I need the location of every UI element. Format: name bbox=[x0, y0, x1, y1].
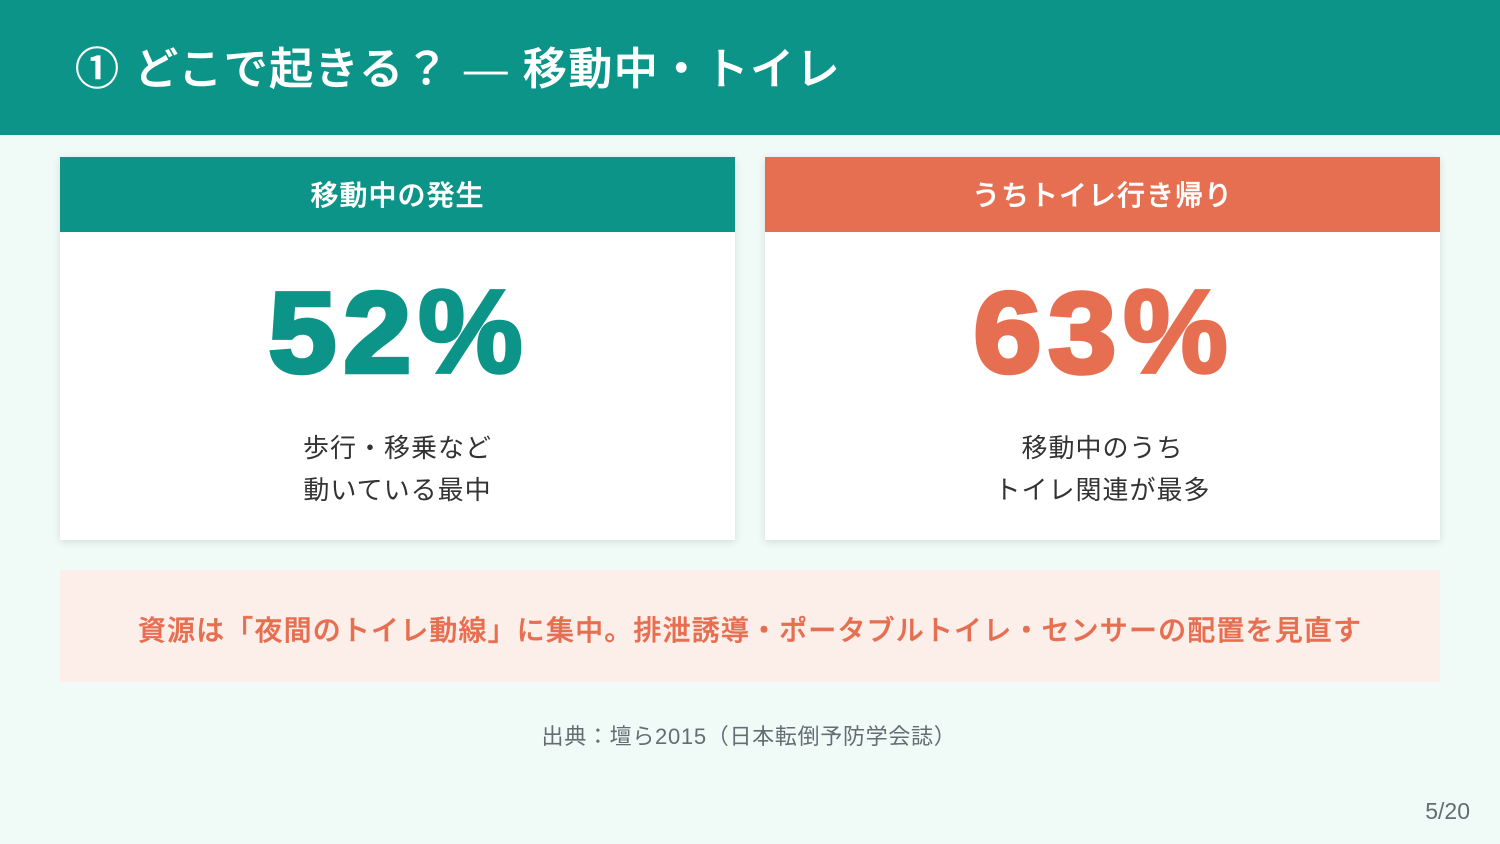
panel heading: movement bbox=[60, 157, 735, 232]
panel: toilet share bbox=[765, 157, 1440, 540]
big number: 63%: 63 bbox=[974, 270, 1123, 397]
header band bbox=[0, 0, 1500, 135]
panel heading: toilet: うちトイレ行き帰り bbox=[972, 180, 1233, 211]
description: toilet: 移動中のうち bbox=[1021, 433, 1184, 463]
title: ① どこで起きる？ — 移動中・トイレ bbox=[75, 45, 841, 94]
big number: 63%: % bbox=[1123, 266, 1228, 398]
panel: movement share bbox=[60, 157, 735, 540]
page number: 5/20 bbox=[1425, 798, 1470, 824]
description: toilet: トイレ関連が最多 bbox=[994, 475, 1210, 505]
source note: 出典：壇ら2015（日本転倒予防学会誌） bbox=[542, 724, 956, 749]
description: toilet bbox=[994, 433, 1210, 505]
callout bbox=[60, 570, 1440, 682]
description: movement: 歩行・移乗など bbox=[303, 433, 492, 463]
big number: 63% bbox=[974, 266, 1228, 398]
panel heading: movement: 移動中の発生 bbox=[310, 180, 484, 211]
big number: 52% bbox=[269, 266, 523, 398]
big number: 52%: % bbox=[418, 266, 523, 398]
description: movement bbox=[303, 433, 492, 505]
callout: 資源は「夜間のトイレ動線」に集中。排泄誘導・ポータブルトイレ・センサーの配置を見直す bbox=[138, 615, 1362, 646]
big number: 52%: 52 bbox=[269, 270, 418, 397]
panel heading: toilet bbox=[765, 157, 1440, 232]
description: movement: 動いている最中 bbox=[303, 475, 492, 505]
